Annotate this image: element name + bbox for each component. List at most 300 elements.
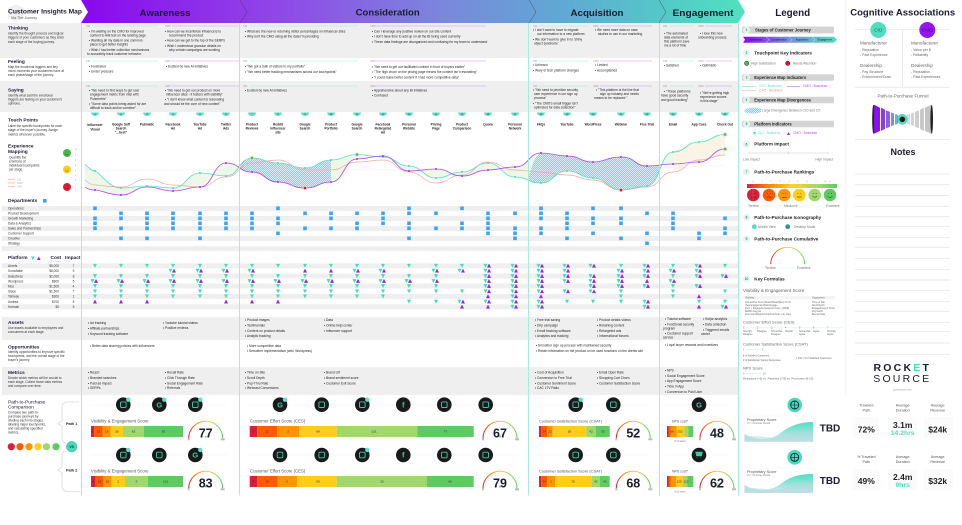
assets row: • Data xyxy=(324,318,333,322)
path comparison label: Path-to-Purchase xyxy=(8,400,46,406)
touch point number badges: 16 xyxy=(487,113,490,116)
legend heading: Legend xyxy=(775,8,810,19)
touch point names: Page xyxy=(432,126,440,130)
legend section numbers: 7 xyxy=(746,170,748,174)
departments heading and labels: Growth Marketing xyxy=(8,216,33,220)
score gauges: 79 xyxy=(493,476,507,490)
thinking row text: • I love this new xyxy=(700,31,723,35)
assets row: service xyxy=(663,336,673,340)
acquisition score bars: 78 xyxy=(571,480,575,484)
assets row xyxy=(8,317,729,340)
feeling row text xyxy=(89,63,717,80)
acquisition score bars: 24 xyxy=(542,430,546,434)
platform heading and table: 5 xyxy=(73,279,75,283)
awareness score bars: Visibility & Engagement Score xyxy=(91,468,149,474)
experience mapping label and scale: 1 xyxy=(75,190,77,192)
ranking scale and faces: 1 xyxy=(761,181,763,183)
touch points label: Touch Points xyxy=(8,118,38,124)
touch point number badges: 13 xyxy=(408,113,411,116)
platform indicator key: CMO - Business xyxy=(793,131,817,135)
legend section numbers: 9 xyxy=(746,237,748,241)
acquisition score bars: 22 xyxy=(548,430,552,434)
awareness score bars: 28 xyxy=(115,430,119,434)
thinking row text xyxy=(87,28,727,56)
acquisition score bars: 43 xyxy=(603,480,607,484)
touch point names: Google Soft xyxy=(112,122,131,126)
path 2 stats: 2.4m xyxy=(893,472,913,482)
saying row text: • "We need to get our product on more xyxy=(165,88,221,92)
touch point number badges: 4 xyxy=(172,113,174,116)
divergence swatch: Large Divergence Between CIO and CX xyxy=(762,109,821,113)
path brackets and versus badge: Path 2 xyxy=(66,468,77,472)
ranking scale and faces: Mediocre xyxy=(784,204,798,208)
cognitive heading: Cognitive Associations xyxy=(850,8,955,18)
feeling row text: • "We need to get our facilitated content in front of buyers earlier" xyxy=(372,65,466,69)
touch point names: Network xyxy=(509,126,522,130)
consideration score bars: 19 xyxy=(265,480,269,484)
CIO and CMO badges xyxy=(870,22,935,38)
touch point names: Personal xyxy=(508,122,522,126)
opportunities row: • Smoother sign up process with maintained security xyxy=(536,344,612,348)
key formulas: Somewhat xyxy=(799,330,811,333)
proprietary score panels: Proprietary Score xyxy=(747,470,777,474)
metrics row: • Pop-Thru Rate xyxy=(245,381,269,385)
touch point names: YouTube xyxy=(560,122,574,126)
touch point number badges: 14 xyxy=(435,113,438,116)
key formulas: View Engagement/Post Engage xyxy=(745,304,778,307)
panel: cognitive associations: - Value per $ xyxy=(911,48,931,52)
assets row: Use assets available to employees and xyxy=(8,326,64,330)
thinking row text: content to A/B test on the landing page xyxy=(90,33,146,37)
touch point number badges: 2 xyxy=(120,113,122,116)
path 2 stats: Revenue xyxy=(930,460,945,464)
metrics row xyxy=(8,369,705,394)
key formulas: Engaged/Avg of Posts xyxy=(812,307,836,310)
key formulas: Competitive Score [Reach/Reach[Rev] 1h %] xyxy=(745,301,791,304)
platform heading and table: $1,500 xyxy=(49,290,59,294)
touch point names: Visual xyxy=(90,128,100,132)
assets row: • Functional security xyxy=(665,323,695,327)
key formulas: Time on Site xyxy=(812,301,826,304)
title block: Via The Journey xyxy=(11,16,37,20)
key formulas: 2 xyxy=(757,326,759,330)
platform heading and table: 7 xyxy=(73,290,75,294)
touch point names: Search xyxy=(116,126,126,130)
touch point names xyxy=(87,122,734,134)
key formulas: 10 xyxy=(763,373,766,376)
key formulas: Customer Satisfaction Score (CSAT) xyxy=(743,342,809,346)
proprietary score panels xyxy=(744,398,840,493)
experience line key xyxy=(742,84,827,92)
experience mapping label and scale: 7 xyxy=(75,165,77,167)
feeling row text: • Frustrated xyxy=(89,65,106,69)
metrics row: • Customer Sentiment Score xyxy=(535,381,576,385)
touch point names: App Cues xyxy=(692,122,707,126)
engagement nps bars: 66 xyxy=(670,430,674,434)
saying row text: • "This platform is the line that xyxy=(596,88,639,92)
departments heading and labels: Operations xyxy=(8,206,24,210)
assets row: • Keyword tracking software xyxy=(88,332,128,336)
left labels: thinking, feeling, saying: opinions. xyxy=(8,102,21,106)
platform heading and table: Snowflake xyxy=(8,269,23,273)
saying row text: engagement metric from intel with xyxy=(90,93,139,97)
assets row: • Hotjar analytics xyxy=(703,317,728,321)
saying row text: • "The CMO's email trigger isn't xyxy=(533,101,578,105)
touch point names: Check Out xyxy=(717,122,734,126)
iconography key: Desktop Mode xyxy=(794,225,815,229)
key formulas: 5 xyxy=(799,326,801,330)
touch point names: Ads xyxy=(223,126,229,130)
key formulas: 5 xyxy=(762,348,764,352)
key formulas: 1 xyxy=(743,348,745,352)
acquisition score bars: 24 xyxy=(542,480,546,484)
legend section titles: Touchpoint Key Indicators xyxy=(754,51,812,56)
metrics row: • Shopping Cart Churn xyxy=(597,376,630,380)
cumulative gauge xyxy=(765,247,810,270)
panel: cognitive associations xyxy=(850,8,955,490)
platform indicator key: CIO - Business xyxy=(758,131,781,135)
left labels: thinking, feeling, saying: triggers are feeling on your customer's xyxy=(8,98,63,102)
ranking scale and faces: 3 xyxy=(779,181,781,183)
ranking scale and faces: 2 xyxy=(770,181,772,183)
metrics row: • Recall Rate xyxy=(165,371,184,375)
touch point names: Reviews xyxy=(246,126,259,130)
path 2 stats xyxy=(853,455,953,490)
metrics row: • App Engagement Score xyxy=(665,379,702,383)
path comparison label xyxy=(8,400,60,450)
opportunities row: buyer's journey. xyxy=(8,358,30,362)
thinking row text: onboarding process xyxy=(698,35,727,39)
left labels: thinking, feeling, saying: Thinking xyxy=(8,26,28,32)
path comparison label: Compare two path-to- xyxy=(8,410,39,414)
CMO associations: Dealership xyxy=(911,63,933,68)
touch point names: Portfolio xyxy=(324,126,338,130)
touch point number badges xyxy=(91,112,729,116)
consideration score bars: 121 xyxy=(371,430,377,434)
platform heading and table xyxy=(8,255,81,309)
left labels: thinking, feeling, saying: Map the emotional triggers and key xyxy=(8,65,58,69)
touch point number badges: 12 xyxy=(382,113,385,116)
proprietary score panels: 1h = Corporate Wealth xyxy=(747,422,771,425)
thinking row text: studies to use in our marketing xyxy=(598,32,642,36)
mini stage chevrons: Acquisition xyxy=(796,38,809,42)
path 1 stats: Revenue xyxy=(930,408,945,412)
platform heading and table: Impact xyxy=(65,255,81,261)
satisfaction indicators: High Satisfaction xyxy=(751,61,776,65)
awareness score bars: 15 xyxy=(97,430,100,434)
saying row text: • Confused xyxy=(372,94,388,98)
satisfaction indicators xyxy=(744,61,816,66)
engagement nps bars: % of users xyxy=(674,440,686,443)
ranking scale and faces: Terrible xyxy=(748,204,759,208)
title block: Customer Insights Map xyxy=(8,8,82,16)
path 1 stats: Duration xyxy=(896,408,910,412)
experience mapping label and scale: Experience xyxy=(8,144,34,150)
legend section numbers: 3 xyxy=(746,76,748,80)
legend section titles: Path-to-Purchase Iconography xyxy=(754,215,822,220)
path 1 touchpoint icons: G xyxy=(156,400,162,409)
saying row text: and should be the core of new content" xyxy=(164,102,221,106)
mini stage chevrons xyxy=(743,37,837,43)
path 1 touchpoint icons xyxy=(90,397,730,412)
platform heading and table: 9 xyxy=(73,269,75,273)
path 1 stats: $24k xyxy=(928,424,947,434)
touch point names: Google xyxy=(300,122,311,126)
score gauges: 48 xyxy=(710,426,724,440)
feeling row text: • Unheard xyxy=(533,63,548,67)
metrics row: Metrics xyxy=(8,370,25,376)
metrics row: • Cost of Acquisition xyxy=(535,371,564,375)
satisfaction indicators: Needs Attention xyxy=(793,61,816,65)
legend section bars xyxy=(742,26,834,127)
platform heading and table: Salesforce xyxy=(8,274,23,278)
platform heading and table: $0 xyxy=(55,305,59,309)
touch point names: Twitter xyxy=(221,122,232,126)
engagement nps bars: NPS cost* xyxy=(672,470,689,474)
platform heading and table: 0-10 xyxy=(66,261,71,263)
thinking row text: me a lot of time xyxy=(664,43,686,47)
key formulas: Agree xyxy=(813,330,820,333)
assets row: • Retaining content xyxy=(597,324,624,328)
CIO associations: Manufacturer xyxy=(860,40,888,46)
path comparison label: Comparison xyxy=(8,404,34,410)
touch point number badges: 22 xyxy=(646,113,649,116)
touch points label: Label the specific touchpoints for each xyxy=(8,124,62,128)
legend section titles xyxy=(754,27,822,281)
thinking row text: • Wanting all my data in one common xyxy=(89,39,143,43)
platform heading and table: Wordpress xyxy=(8,279,24,283)
legend section numbers: 4 xyxy=(746,98,748,102)
feeling row text: • Accomplished xyxy=(595,68,617,72)
ranking scale and faces xyxy=(747,181,839,208)
platform heading and table: 8 xyxy=(73,274,75,278)
metrics row: • Referrals xyxy=(165,386,181,390)
proprietary score panels: TBD xyxy=(820,424,840,434)
touch point names: Product xyxy=(456,122,469,126)
rocket source logo: SOURCE xyxy=(873,373,931,385)
experience mapping label and scale: 3 xyxy=(75,180,77,182)
path comparison label: metrics. xyxy=(8,430,19,434)
thinking row text: why certain campaigns are working xyxy=(169,48,220,52)
platform heading and table: Cost xyxy=(50,255,62,261)
thinking row text: • Wish I had better collection mechanisms xyxy=(89,48,150,52)
legend section numbers: 5 xyxy=(746,122,748,126)
path comparison label: labeling major touchpoints, xyxy=(8,422,46,426)
engagement nps bars: 135 xyxy=(676,480,682,484)
assets row: • Content on product details xyxy=(245,329,285,333)
acquisition score bars: 55 xyxy=(601,430,605,434)
opportunities row: • Retain information on the product on be used functions on the clients site xyxy=(536,349,643,353)
thinking row text: • How can we get to the top of the SERPs xyxy=(165,39,225,43)
opportunities row: Opportunities xyxy=(8,344,40,350)
header: journey stage chevrons: Acquisition xyxy=(570,8,624,19)
platform heading and table: 4 xyxy=(73,284,75,288)
legend section titles: Platform Indicators xyxy=(754,121,792,126)
path 2 stats: Average xyxy=(896,455,910,459)
saying row text: experience scores xyxy=(700,95,727,99)
touch point number badges: 21 xyxy=(620,113,623,116)
assets row: program xyxy=(663,326,675,330)
proprietary score panels: Proprietary Score xyxy=(747,418,777,422)
path 1 touchpoint icons: G xyxy=(696,400,702,409)
metrics row: • Time in App xyxy=(665,385,684,389)
assets row: • Affiliate partnerships xyxy=(88,327,120,331)
awareness score bars: 16 xyxy=(106,480,109,484)
path 2 stats: $32k xyxy=(928,476,947,486)
key formulas: 1 xyxy=(743,326,745,330)
touch point names: Facebook xyxy=(166,122,181,126)
platform heading and table: 7 xyxy=(73,264,75,268)
assets row: Assets xyxy=(8,320,24,326)
legend section titles: Experience Map Divergences xyxy=(754,97,812,102)
ranking scale and faces: 4 xyxy=(788,181,790,183)
row backgrounds xyxy=(0,23,738,395)
touch point number badges: 18 xyxy=(540,113,543,116)
CMO associations: Manufacturer xyxy=(911,40,939,46)
assets row: • Product details videos xyxy=(597,318,631,322)
path 2 stats: 49% xyxy=(858,476,875,486)
feeling row text: • Excited by new AI initiatives xyxy=(166,65,208,69)
experience mapping label and scale: Mapping xyxy=(8,149,28,155)
score gauges: 77 xyxy=(199,426,213,440)
CIO and CMO badges: CMO xyxy=(922,28,933,33)
saying row text: • Apprehensive about any BI initiatives xyxy=(372,88,428,92)
key formulas: Strongly xyxy=(827,330,837,333)
departments heading and labels: Customer Support xyxy=(8,232,34,236)
touch point names: Influencer xyxy=(87,123,103,127)
touch point number badges: 20 xyxy=(592,113,595,116)
metrics row: • Customer Satisfaction Score xyxy=(597,381,640,385)
consideration score bars: Customer Effort Score (CES) xyxy=(250,468,306,474)
cumulative gauge: Terrible xyxy=(765,266,776,270)
panel: cognitive associations: - Reputation xyxy=(911,70,930,74)
legend section numbers: 2 xyxy=(746,51,748,55)
thinking row text: this platform save xyxy=(664,39,690,43)
touch point number badges: 9 xyxy=(304,113,306,116)
saying row text: • "We need to prioritize security xyxy=(533,88,578,92)
metrics row: and compare over time. xyxy=(8,384,42,388)
score gauges: 52 xyxy=(626,426,640,440)
consideration score bars: 60 xyxy=(316,480,320,484)
platform heading and table: Platform xyxy=(8,255,27,261)
left labels: thinking, feeling, saying: Identify the thought process and logical xyxy=(8,32,64,36)
engagement nps bars: NPS cost* xyxy=(672,420,689,424)
engagement nps bars: 152 xyxy=(677,430,683,434)
header: journey stage chevrons: Awareness xyxy=(140,8,190,19)
path 1 stats: 3.1m xyxy=(893,420,913,430)
platform heading and table: $800 xyxy=(52,279,59,283)
awareness score bars xyxy=(91,418,183,487)
metrics row: • SERPs xyxy=(88,386,101,390)
metrics row: • Paid ad impact xyxy=(88,381,112,385)
platform matrix: CMO markers xyxy=(93,264,728,308)
experience mapping label and scale: 9 xyxy=(75,155,77,157)
platform heading and table: $2,000 xyxy=(49,274,59,278)
cumulative gauge: Excellent xyxy=(797,266,810,270)
thinking row text: • I'm waiting on the CMO for improved xyxy=(89,29,144,33)
platform heading and table: $5,000 xyxy=(49,264,59,268)
saying row text: sign up industry and needs xyxy=(600,92,639,96)
thinking row text: • We don't want to give in to 'shiny xyxy=(533,38,582,42)
platform indicator key xyxy=(753,131,817,135)
touch point number badges: 23 xyxy=(672,113,675,116)
departments heading and labels: Sales and Partnerships xyxy=(8,226,41,230)
assets row: • Testimonials xyxy=(245,324,265,328)
touch point number badges: 11 xyxy=(356,113,359,116)
saying row text xyxy=(89,88,729,110)
opportunities row: • Loyal buyer rewards and incentives xyxy=(665,343,718,347)
iconography key xyxy=(752,224,815,229)
thinking row text: • What are the new or returning visitor percentages on influencer sites xyxy=(245,29,346,33)
key formulas: Visibility xyxy=(745,296,755,300)
path 2 stats: Path xyxy=(863,460,870,464)
key formulas: NPS Score xyxy=(743,366,764,370)
vertical stage dividers xyxy=(81,0,846,496)
thinking row text: • Can I leverage any positive review on our site content xyxy=(372,29,451,33)
acquisition score bars: 2 xyxy=(550,480,552,484)
assets row: • Analytic tracking xyxy=(245,334,271,338)
ranking scale and faces: 5 xyxy=(797,181,799,183)
acquisition score bars: 42 xyxy=(594,480,598,484)
key formulas: Neutral xyxy=(785,330,793,333)
funnel xyxy=(872,105,933,134)
metrics row: • Brand Lift xyxy=(324,371,340,375)
ranking scale and faces: 8 xyxy=(824,181,826,183)
left labels: thinking, feeling, saying: triggers of your customers as they enter xyxy=(8,36,65,40)
experience mapping label and scale: individual touchpoints xyxy=(9,164,40,168)
touch point names: Search xyxy=(352,126,362,130)
touch point names: YouTube xyxy=(193,122,207,126)
thinking row text: place to get better insights xyxy=(90,43,128,47)
impact scale xyxy=(743,152,833,162)
touch point names: Retargeted xyxy=(375,126,391,130)
consideration score bars: 69 xyxy=(316,430,320,434)
touch point names: site xyxy=(275,130,281,134)
awareness score bars: Visibility & Engagement Score xyxy=(91,418,149,424)
platform heading and table: 5 xyxy=(73,305,75,309)
key formulas: 3 xyxy=(771,326,773,330)
feeling row text: • "We need better tracking mechanisms across our touchpoints" xyxy=(245,70,337,74)
awareness score bars: 8 xyxy=(92,480,94,484)
mini stage chevrons: Awareness xyxy=(750,38,763,42)
key formulas: 4 xyxy=(785,326,787,330)
feeling row text: • Satisfied xyxy=(664,63,679,67)
panel: cognitive associations: - Reputation xyxy=(860,48,879,52)
touch point names: Free Trial xyxy=(640,122,654,126)
path brackets and versus badge: Path 1 xyxy=(66,422,77,426)
thinking row text: • The automated xyxy=(664,31,688,35)
metrics row: each stage. Collect those data metrics xyxy=(8,380,62,384)
metrics row: • Click Through Rate xyxy=(165,376,195,380)
header: journey stage chevrons: Engagement xyxy=(672,8,734,19)
legend section titles: Stages of Customer Journey xyxy=(755,27,811,32)
saying row text: • "We need to find ways to get user xyxy=(89,88,140,92)
metrics row: • Scroll Depth xyxy=(245,376,265,380)
departments heading and labels: Data & Analytics xyxy=(8,222,32,226)
legend section numbers: 6 xyxy=(746,142,748,146)
panel: cognitive associations: - Environment/Team xyxy=(860,75,891,79)
opportunities row: • Better data sharing policies with influencers xyxy=(90,344,155,348)
saying row text: have good security xyxy=(661,94,689,98)
key formulas: # of Satisfaction Survey Responses xyxy=(743,359,782,362)
consideration score bars: 33 xyxy=(380,480,384,484)
experience mapping label and scale: CIO xyxy=(17,178,21,181)
experience mapping label and scale: CXO xyxy=(17,185,22,188)
touch point number badges: 24 xyxy=(698,113,701,116)
path 2 stats: Duration xyxy=(896,460,910,464)
experience mapping label and scale: 4 xyxy=(75,175,77,177)
assets row: • Email tracking software xyxy=(535,329,571,333)
